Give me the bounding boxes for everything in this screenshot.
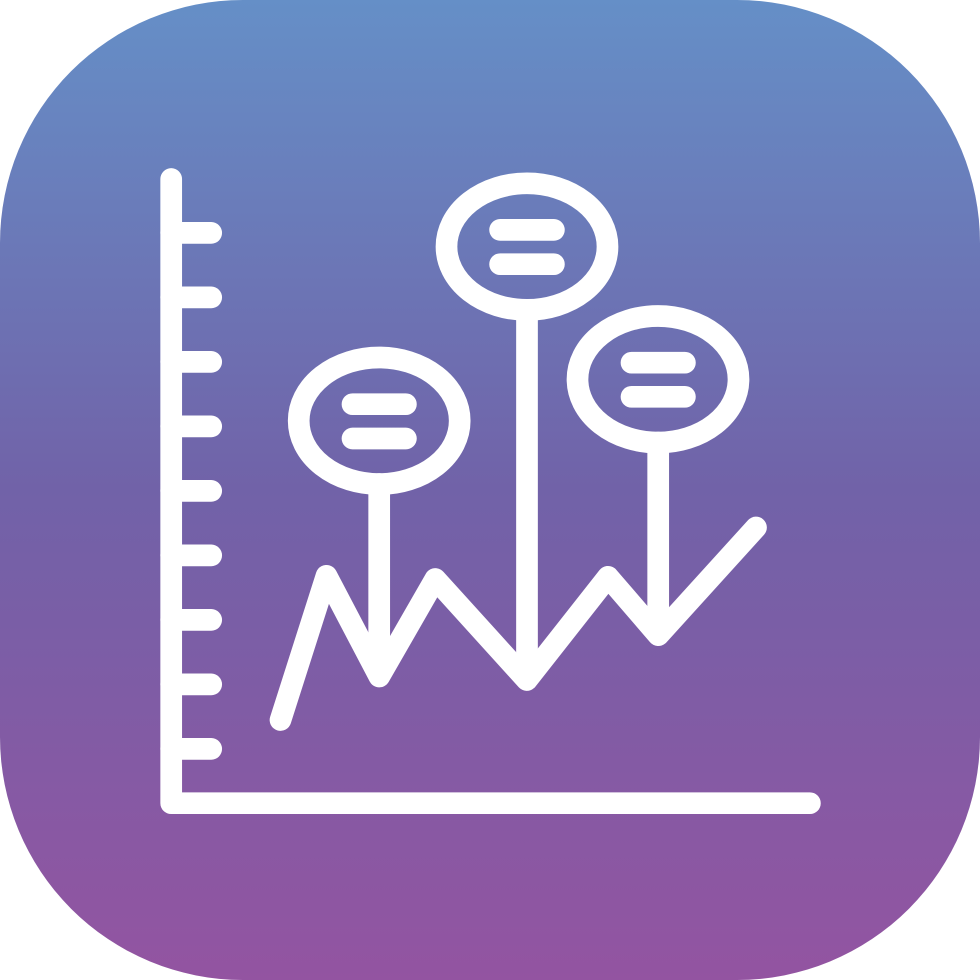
chart: line chart icon xyxy=(171,179,810,803)
axis ticks xyxy=(171,233,211,749)
pin: left xyxy=(299,358,460,660)
trend line xyxy=(280,528,756,720)
axes xyxy=(171,179,810,803)
pin: right xyxy=(578,316,738,620)
pin: centre xyxy=(446,183,608,665)
